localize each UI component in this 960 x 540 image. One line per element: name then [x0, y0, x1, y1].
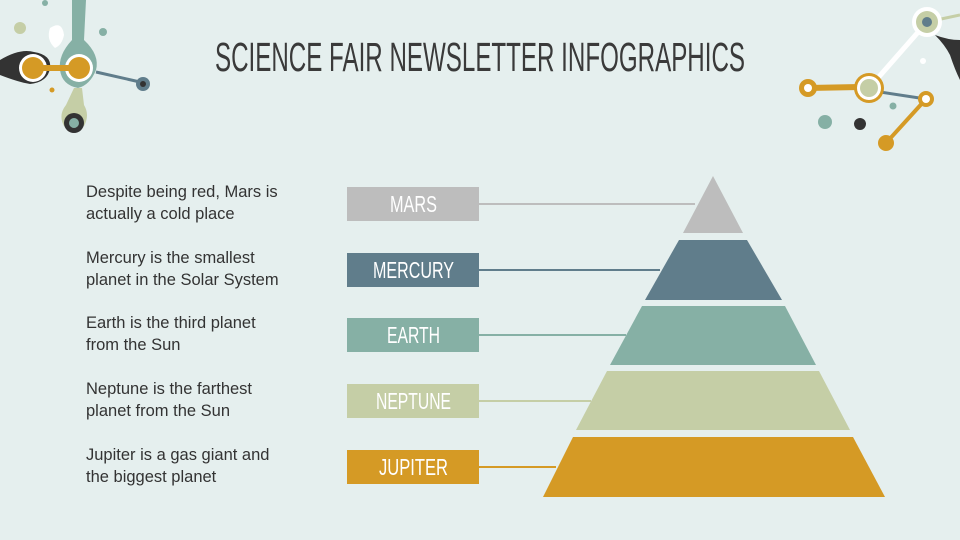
label: mars: MARS: [390, 191, 437, 217]
connector lines: [479, 203, 695, 205]
label: earth: [347, 318, 479, 352]
text: earth: from the Sun: [86, 336, 180, 354]
tier: jupiter: [543, 437, 885, 497]
label: neptune: [347, 384, 479, 418]
label: jupiter: [347, 450, 479, 484]
text: mercury: [86, 249, 279, 289]
tier: mars: [683, 176, 743, 233]
text: mercury: Mercury is the smallest: [86, 249, 255, 267]
tier: earth: [610, 306, 816, 365]
text: mars: Despite being red, Mars is: [86, 183, 278, 201]
label: earth: EARTH: [387, 322, 440, 348]
label: mars: [347, 187, 479, 221]
text: jupiter: the biggest planet: [86, 468, 216, 486]
text: neptune: [86, 380, 252, 420]
text: neptune: Neptune is the farthest: [86, 380, 252, 398]
tier: mercury: [645, 240, 782, 300]
decoration: top-right molecules: [799, 7, 960, 151]
text: mars: [86, 183, 278, 223]
tier: neptune: [576, 371, 850, 430]
text: mars: actually a cold place: [86, 205, 235, 223]
text: earth: Earth is the third planet: [86, 314, 256, 332]
label: jupiter: JUPITER: [379, 454, 448, 480]
text: jupiter: Jupiter is a gas giant and: [86, 446, 269, 464]
decoration: top-left molecules: [0, 0, 150, 133]
text: mercury: planet in the Solar System: [86, 271, 279, 289]
text: earth: [86, 314, 256, 354]
label: mercury: MERCURY: [373, 257, 454, 283]
text: neptune: planet from the Sun: [86, 402, 230, 420]
text: jupiter: [86, 446, 269, 486]
label: mercury: [347, 253, 479, 287]
label: neptune: NEPTUNE: [376, 388, 451, 414]
